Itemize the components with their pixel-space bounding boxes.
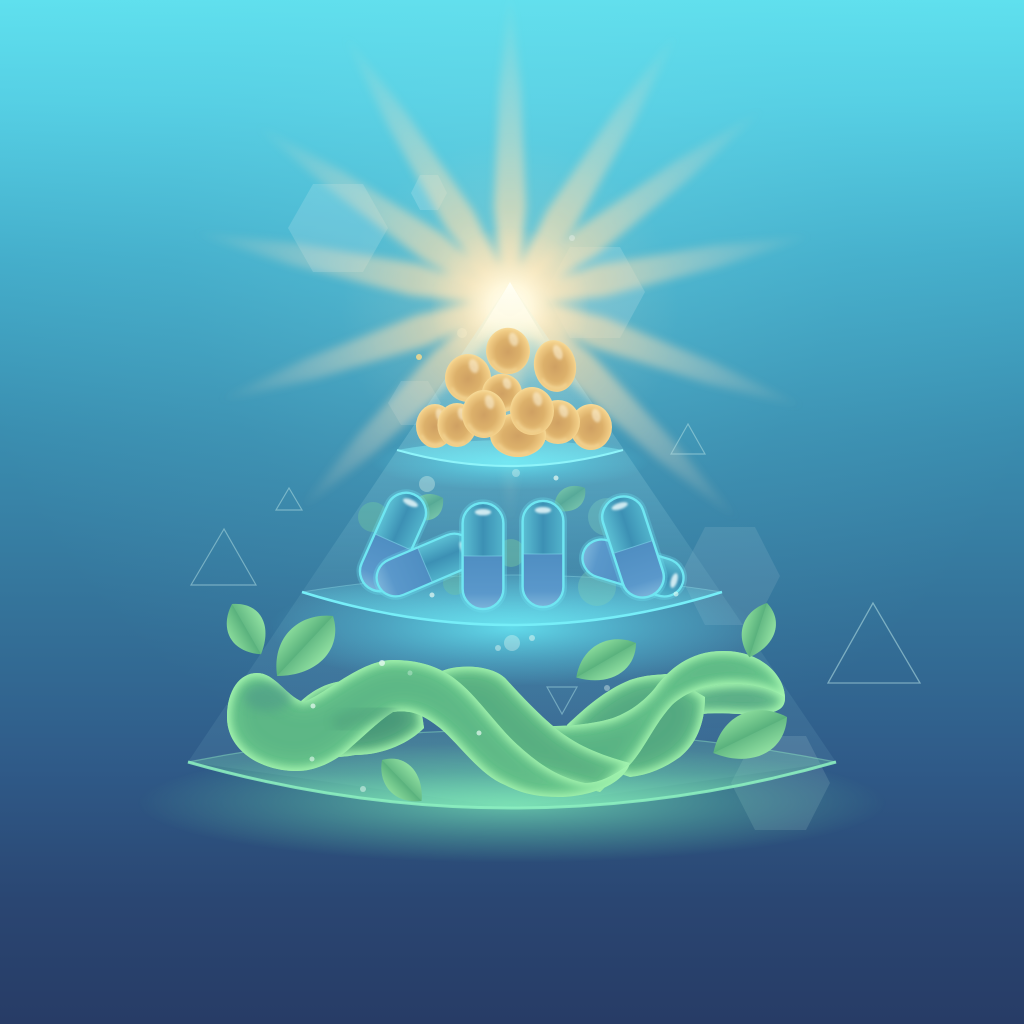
tier 2 disc: [302, 575, 722, 625]
ribbon: main strand and left lobe: [227, 660, 630, 797]
outline triangle: left large: [191, 529, 256, 585]
ribbon: back left strand: [300, 681, 424, 757]
softgel pile: [416, 328, 612, 457]
ribbon: right band and lobe: [500, 651, 785, 790]
capsule: centre left upright: [462, 502, 504, 610]
ribbon: right lobe underside: [688, 683, 785, 716]
glow under middle tier: [267, 570, 757, 686]
tier 1 disc: [397, 440, 623, 466]
twisted green ribbon: [227, 651, 785, 797]
ribbon: centre strand: [430, 667, 630, 792]
background bubbles and leaves behind capsules: [358, 476, 626, 606]
hexagon: left mid: [388, 381, 441, 425]
leaf: upper left small: [216, 595, 277, 663]
ribbon: fold shading: [244, 683, 395, 726]
hexagon: right mid: [680, 527, 780, 625]
leaf: upper left large: [261, 601, 349, 691]
sun glow: [430, 226, 590, 386]
warm haze around the sun: [340, 140, 680, 480]
hexagon: small top: [411, 175, 447, 210]
hexagon: right of sun: [545, 247, 645, 338]
outline triangle: right small: [671, 424, 705, 454]
pyramid apex highlight: [474, 282, 546, 342]
leaf: lower left: [371, 749, 433, 812]
leaf: upper right: [734, 598, 782, 662]
sparkles and particles: [310, 235, 678, 792]
outline triangle: inverted: [547, 687, 577, 714]
glow under top tier: [370, 434, 650, 490]
outline triangle: left small: [276, 488, 302, 510]
leaf: centre right: [567, 628, 645, 693]
capsule: right lying: [576, 533, 690, 603]
pyramid body: [188, 282, 836, 808]
leaf: lower right: [703, 697, 797, 774]
hexagon: large left: [288, 184, 388, 272]
capsule: back left tilted: [352, 485, 434, 599]
outline triangle: right large: [828, 603, 920, 683]
starburst rays: [186, 0, 819, 535]
hexagon: lower right: [731, 736, 830, 830]
tier 3 disc: [188, 730, 836, 808]
glow under bottom tier: [137, 743, 887, 863]
capsule: right front tilted: [596, 490, 670, 604]
capsule: left lying: [369, 526, 481, 604]
capsule: centre right upright: [522, 500, 564, 608]
ribbon: back right strand: [567, 674, 705, 777]
capsules: [352, 485, 690, 610]
